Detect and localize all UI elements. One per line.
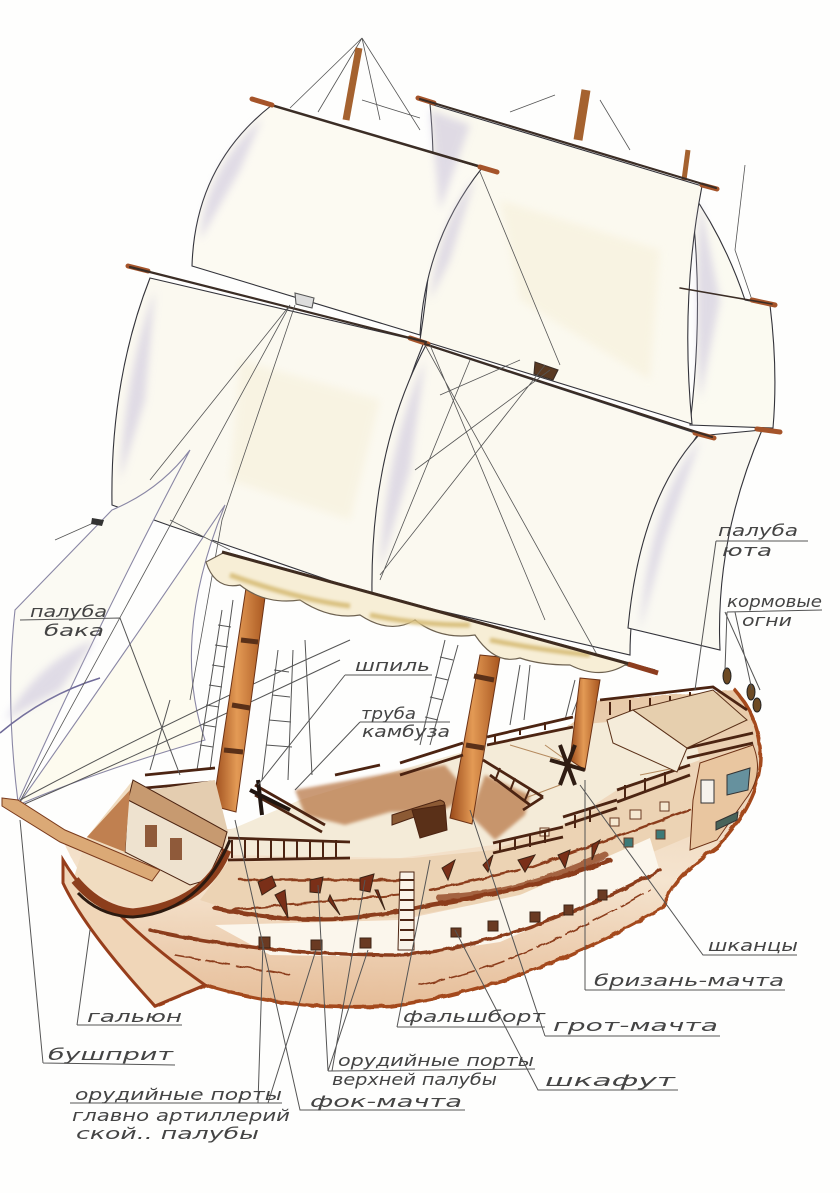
deck shading	[295, 765, 530, 840]
label: орудийные порты главной артиллерийской палубы: ской.. палубы	[76, 1124, 259, 1143]
label: палуба юта: юта	[722, 541, 772, 560]
top of main mast	[578, 90, 586, 140]
label: орудийные порты главной артиллерийской палубы: орудийные порты	[75, 1085, 282, 1104]
label: шпиль: шпиль	[355, 656, 430, 675]
label: фальшборт: фальшборт	[403, 1007, 546, 1026]
label: палуба бака	[30, 602, 107, 640]
lower jib edge stroke	[0, 678, 100, 733]
label: труба камбуза	[361, 704, 450, 741]
label: кормовые огни: огни	[742, 611, 792, 630]
label: кормовые огни	[727, 592, 822, 630]
hull body	[60, 690, 760, 1007]
stern lanterns	[723, 668, 761, 712]
label: орудийные порты верхней палубы	[332, 1051, 534, 1089]
label leader lines	[20, 541, 822, 1110]
main topsail	[420, 104, 702, 424]
quarterdeck cabin	[607, 710, 687, 772]
white gun deck band	[215, 838, 660, 957]
deck surface	[225, 715, 700, 858]
hull wale lines	[120, 690, 760, 1007]
label: гальюн: гальюн	[87, 1007, 182, 1026]
bowsprit	[2, 798, 160, 881]
ship hull	[2, 588, 761, 1007]
deck inner planks	[510, 745, 690, 800]
label: орудийные порты верхней палубы: верхней палубы	[332, 1070, 497, 1089]
main course	[372, 345, 698, 655]
label: бризань-мачта: бризань-мачта	[594, 971, 784, 990]
label: орудийные порты главной артиллерийской палубы: главно артиллерий	[72, 1106, 290, 1125]
stern gallery	[690, 745, 758, 850]
upper hull band	[200, 772, 698, 918]
label: кормовые огни: кормовые	[727, 592, 822, 611]
label: орудийные порты верхней палубы: орудийные порты	[338, 1051, 534, 1070]
yards	[128, 98, 780, 438]
gun ports upper deck	[258, 840, 600, 918]
label: палуба бака: бака	[44, 621, 104, 640]
mizzen topsail	[690, 190, 775, 428]
deck railings	[145, 687, 753, 860]
jib sails	[11, 450, 190, 802]
label: труба камбуза: камбуза	[362, 722, 450, 741]
label: фок-мачта: фок-мачта	[310, 1092, 462, 1111]
label: шкафут: шкафут	[545, 1071, 676, 1090]
mizzen course	[628, 430, 762, 650]
gun ports lower deck	[259, 890, 607, 950]
label: бушприт: бушприт	[48, 1045, 174, 1064]
hull side ladder	[398, 872, 414, 950]
label: палуба юта	[718, 521, 798, 560]
furled course sail on lower yard	[206, 552, 658, 673]
stays over sails	[18, 172, 600, 805]
sail tint shading	[5, 110, 720, 720]
masts tops and upper rigging	[290, 38, 752, 300]
label: шканцы: шканцы	[708, 936, 798, 955]
label: палуба бака: палуба	[30, 602, 107, 621]
label: палуба юта: палуба	[718, 521, 798, 540]
label: грот-мачта: грот-мачта	[553, 1016, 718, 1035]
top of mizzen mast	[684, 150, 688, 180]
label: орудийные порты главной артиллерийской палубы	[72, 1085, 290, 1143]
forecastle with head	[63, 780, 230, 1006]
small windows	[540, 802, 669, 847]
ladders and shrouds	[20, 600, 585, 806]
fore course	[112, 278, 424, 595]
top of fore mast	[346, 48, 359, 120]
sails	[0, 98, 780, 805]
masts	[213, 588, 266, 812]
fore topsail	[192, 105, 482, 335]
label: труба камбуза: труба	[361, 704, 416, 723]
